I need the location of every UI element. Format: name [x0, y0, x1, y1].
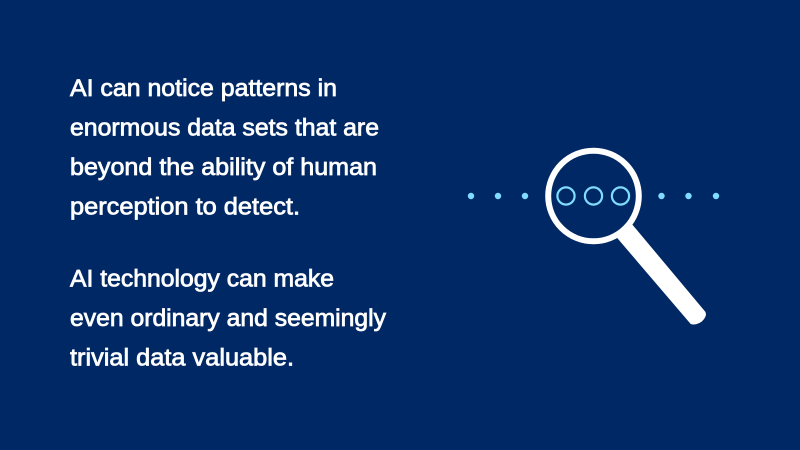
text block: patterns paragraph: enormous data sets that are [70, 114, 379, 142]
text block: patterns paragraph: beyond the ability of human [70, 154, 377, 181]
magnifier lens ring [548, 151, 639, 241]
text block: patterns paragraph: perception to detect. [70, 194, 300, 220]
text block: trivial data paragraph: AI technology can make [70, 266, 334, 292]
dots left of the lens [468, 193, 528, 199]
text block: trivial data paragraph: trivial data valuable. [70, 344, 294, 372]
icon: magnifying glass over dotted data [468, 151, 719, 324]
text block: patterns paragraph: AI can notice patterns in [70, 75, 337, 102]
text block: trivial data paragraph [70, 266, 386, 372]
dots right of the lens [658, 193, 719, 199]
text block: patterns paragraph [70, 75, 379, 220]
text block: trivial data paragraph: even ordinary and seemingly [70, 305, 386, 332]
magnifier handle [616, 223, 706, 324]
magnified rings inside the lens [557, 187, 629, 205]
